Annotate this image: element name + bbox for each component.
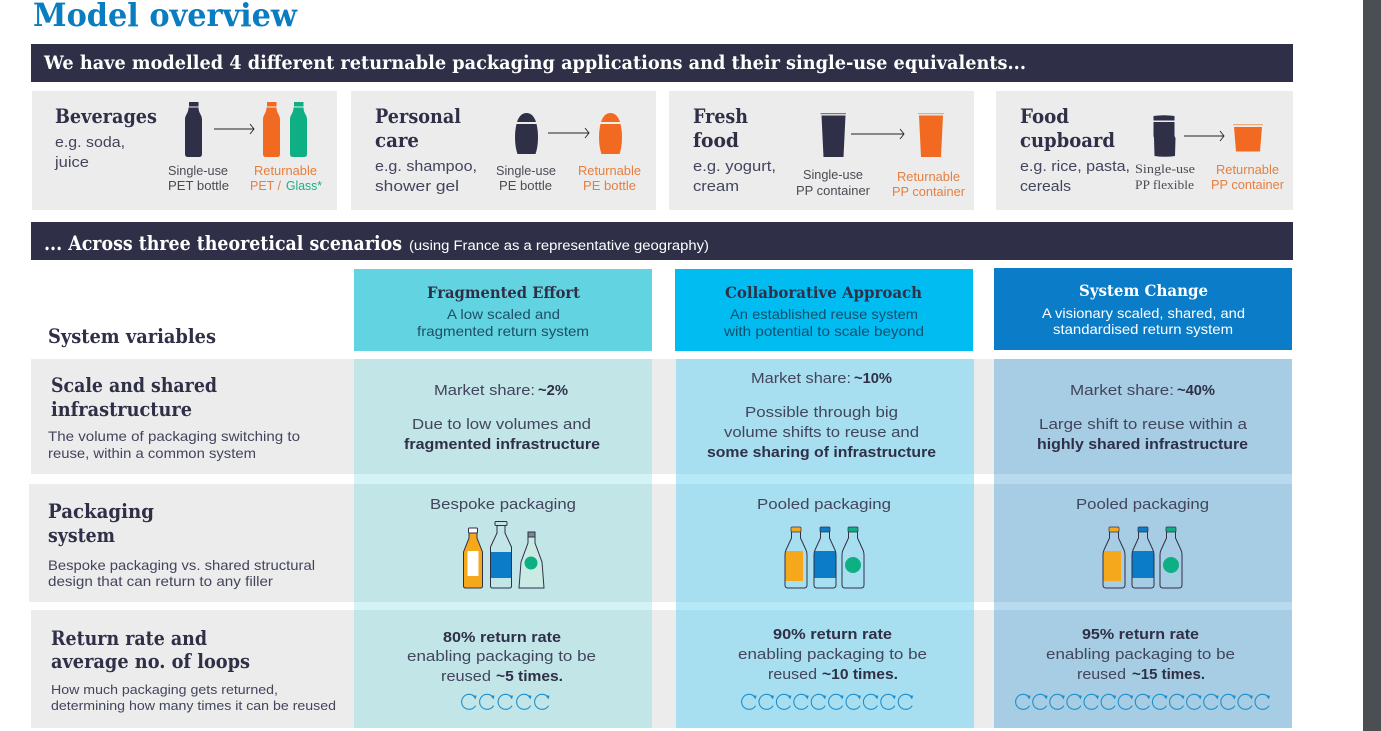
icon: single-use PE bottle	[515, 113, 538, 154]
row label: scale and shared infrastructure: Scale and shared	[51, 373, 217, 397]
return text: collaborative: enabling packaging to be	[738, 646, 927, 663]
icon: returnable PE bottle	[599, 113, 622, 154]
scale text: system change: Large shift to reuse within a	[1039, 416, 1248, 433]
scenario header: collaborative approach: An established reuse system	[730, 306, 918, 322]
panel: food cupboard: cupboard	[1020, 128, 1115, 152]
row label: scale and shared infrastructure: The volume of packaging switching to	[48, 428, 300, 444]
scenario header: system change	[994, 268, 1292, 350]
row label: scale and shared infrastructure: infrastructure	[51, 397, 192, 421]
return text: collaborative	[738, 626, 927, 683]
panel: personal care: e.g. shampoo,	[375, 158, 477, 175]
scenario header: fragmented effort: fragmented return system	[417, 323, 589, 339]
icon: single-use flexible	[1154, 115, 1176, 157]
banner: scenarios: (using France as a representative geography)	[409, 238, 709, 253]
scenario header: system change: standardised return system	[1053, 321, 1233, 337]
banner: applications	[31, 44, 1293, 82]
scenario header: collaborative approach: Collaborative Approach	[725, 283, 922, 302]
return text: system change: 95% return rate	[1082, 626, 1199, 643]
heading: system variables: System variables	[48, 324, 216, 348]
arrow	[851, 129, 904, 139]
scenario header: system change: System Change	[1079, 281, 1208, 300]
scenario header: system change: A visionary scaled, shared, and	[1042, 305, 1245, 321]
scenario header: fragmented effort	[354, 269, 652, 351]
return text: fragmented: ~5 times.	[496, 668, 563, 685]
panel: beverages: PET bottle	[168, 179, 229, 193]
icon: single-use container	[820, 113, 846, 157]
return text: system change	[1046, 626, 1235, 683]
row label: return rate: average no. of loops	[51, 649, 250, 673]
panel: personal care: care	[375, 128, 419, 152]
scenario header: fragmented effort: Fragmented Effort	[427, 283, 581, 302]
row label: packaging system: Packaging	[48, 499, 154, 523]
banner: applications: We have modelled 4 different returnable packaging applications and their single-use equivalents...	[43, 52, 1026, 74]
panel: food cupboard: Food	[1020, 104, 1069, 128]
return text: collaborative: reused	[768, 666, 817, 683]
panel: beverages: Glass*	[286, 179, 322, 193]
scale text: system change: ~40%	[1177, 382, 1215, 399]
panel: fresh food: e.g. yogurt,	[693, 158, 776, 175]
scale text: fragmented: Due to low volumes and	[412, 416, 591, 433]
panel: personal care: PE bottle	[583, 179, 636, 193]
label: pooled packaging system change: Pooled packaging	[1076, 496, 1209, 513]
panel: food cupboard: Single-use	[1135, 162, 1196, 176]
scale text: system change: Market share:	[1070, 382, 1174, 399]
icon: returnable green bottle	[290, 102, 307, 157]
scale text: fragmented: fragmented infrastructure	[404, 436, 600, 453]
panel: food cupboard: PP flexible	[1135, 178, 1194, 192]
panel: fresh food: Returnable	[897, 170, 960, 184]
row label: return rate: Return rate and	[51, 626, 207, 650]
panel: beverages: Beverages	[55, 104, 157, 128]
scale text: collaborative: Possible through big	[745, 404, 898, 421]
row label: return rate	[51, 626, 336, 713]
scale text: collaborative	[707, 370, 936, 461]
return text: system change: ~15 times.	[1132, 666, 1205, 683]
banner: scenarios: ... Across three theoretical scenarios	[44, 232, 402, 255]
row label: scale and shared infrastructure	[48, 373, 300, 461]
panel: fresh food: Single-use	[803, 168, 863, 182]
label: bespoke packaging: Bespoke packaging	[430, 496, 576, 513]
return text: collaborative: ~10 times.	[822, 666, 898, 683]
panel: beverages: e.g. soda,	[55, 134, 125, 151]
scenario header: collaborative approach: with potential to scale beyond	[723, 323, 924, 339]
icon: returnable cup	[1233, 124, 1263, 152]
panel: food cupboard: e.g. rice, pasta,	[1020, 158, 1130, 175]
panel: fresh food: Fresh	[693, 104, 748, 128]
panel: personal care	[351, 91, 656, 210]
return text: fragmented	[407, 629, 596, 685]
banner: scenarios	[31, 222, 1293, 260]
side bar	[1363, 0, 1381, 731]
panel: personal care: Returnable	[578, 164, 641, 178]
row label: packaging system: system	[48, 523, 115, 547]
column: collaborative approach background	[676, 359, 974, 728]
panel: beverages	[32, 91, 337, 210]
panel: food cupboard: cereals	[1020, 178, 1071, 195]
column: fragmented effort background	[354, 359, 652, 728]
scenario header: fragmented effort: A low scaled and	[447, 306, 560, 322]
return text: collaborative: 90% return rate	[773, 626, 892, 643]
panel: fresh food	[669, 91, 974, 210]
row backgrounds	[29, 359, 1292, 728]
scale text: collaborative: Market share:	[751, 370, 851, 387]
panel: personal care: PE bottle	[499, 179, 552, 193]
arrow	[548, 128, 589, 138]
scale text: fragmented	[404, 382, 600, 453]
panel: fresh food: food	[693, 128, 739, 152]
panel: personal care: Personal	[375, 104, 461, 128]
icon: pooled bottles system change	[1103, 527, 1182, 588]
panel: fresh food: PP container	[892, 185, 965, 199]
icon: 5 loops	[462, 694, 550, 709]
scale text: fragmented: Market share:	[434, 382, 535, 399]
row label: packaging system: design that can return to any filler	[48, 573, 273, 589]
icon: bespoke bottles	[464, 522, 544, 588]
icon: returnable container	[918, 113, 944, 157]
row label: packaging system: Bespoke packaging vs. shared structural	[48, 557, 315, 573]
return text: fragmented: reused	[441, 668, 491, 685]
icon: returnable orange bottle	[263, 102, 280, 157]
arrow	[1184, 131, 1224, 141]
icon: 10 loops	[742, 694, 913, 709]
panel: fresh food: PP container	[796, 184, 870, 198]
scale text: system change	[1037, 382, 1248, 453]
panel: food cupboard	[996, 91, 1293, 210]
icon: pooled bottles collaborative	[785, 527, 864, 588]
row label: return rate: How much packaging gets returned,	[51, 682, 278, 697]
panel: food cupboard: Returnable	[1216, 163, 1279, 177]
scale text: system change: highly shared infrastructure	[1037, 436, 1248, 453]
column: system change background	[994, 359, 1292, 728]
panel: beverages: Single-use	[168, 164, 228, 178]
row label: return rate: determining how many times it can be reused	[51, 698, 336, 713]
panel: personal care: Single-use	[496, 164, 556, 178]
panel: beverages: PET /	[250, 179, 282, 193]
scale text: collaborative: volume shifts to reuse and	[724, 424, 919, 441]
scenario header: collaborative approach	[675, 269, 973, 351]
panel: food cupboard: PP container	[1211, 178, 1284, 192]
row label: packaging system	[48, 499, 315, 589]
panel: beverages: Returnable	[254, 164, 317, 178]
return text: fragmented: 80% return rate	[443, 629, 561, 646]
icon: 15 loops	[1016, 694, 1270, 709]
panel: beverages: juice	[54, 154, 89, 171]
scale text: collaborative: ~10%	[854, 370, 892, 387]
scale text: fragmented: ~2%	[538, 382, 568, 399]
return text: fragmented: enabling packaging to be	[407, 648, 596, 665]
label: pooled packaging collaborative: Pooled packaging	[757, 496, 891, 513]
panel: personal care: shower gel	[375, 178, 459, 195]
return text: system change: reused	[1077, 666, 1126, 683]
icon: single-use bottle	[185, 102, 202, 157]
panel: fresh food: cream	[693, 178, 739, 195]
return text: system change: enabling packaging to be	[1046, 646, 1235, 663]
scale text: collaborative: some sharing of infrastructure	[707, 444, 936, 461]
arrow	[214, 124, 254, 134]
row label: scale and shared infrastructure: reuse, within a common system	[48, 445, 256, 461]
